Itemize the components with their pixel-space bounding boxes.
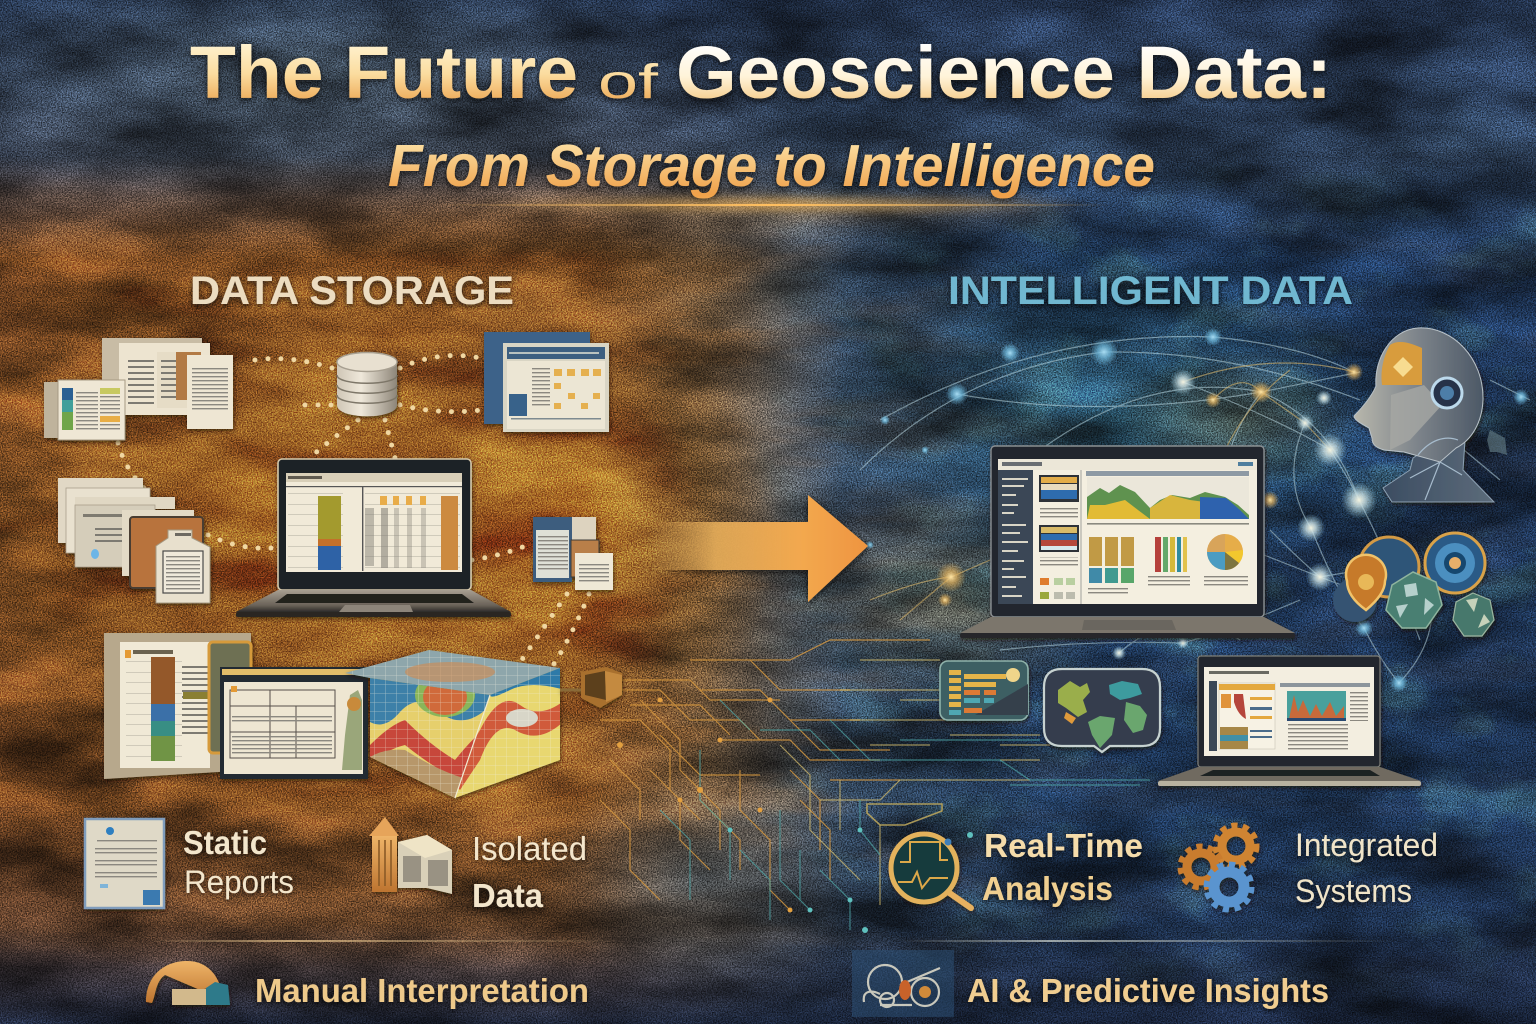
title line 1: Geoscience Data: <box>676 31 1332 114</box>
icon: magnifier real-time analysis <box>891 834 971 908</box>
feature row: storage limits <box>85 817 587 914</box>
label: real-time analysis <box>982 827 1143 907</box>
intelligent data illustration <box>940 328 1507 786</box>
icon: second laptop <box>1158 656 1421 786</box>
label: integrated systems: Systems <box>1295 873 1412 909</box>
dotted connectors <box>118 356 589 670</box>
icon: blue gear <box>1207 865 1251 909</box>
section heading: data storage: DATA STORAGE <box>190 269 514 313</box>
footer: AI and predictive insights <box>852 950 1329 1017</box>
title line 1: of <box>598 56 659 109</box>
label: integrated systems <box>1295 827 1438 909</box>
icon: stacked folders <box>58 478 210 603</box>
icon: trapezoid marker <box>867 804 942 825</box>
icon: data tile <box>940 661 1028 720</box>
footer divider left <box>150 940 620 942</box>
label: manual interpretation: Manual Interpretation <box>255 972 589 1009</box>
icon: small right doc cluster <box>533 517 613 590</box>
icon: orange gear left <box>1181 847 1221 887</box>
icon: integrated gears <box>1181 826 1256 909</box>
network arcs and nodes <box>860 328 1530 692</box>
icon: main analytics laptop <box>960 446 1295 638</box>
icon: bottom report sheets <box>104 633 368 779</box>
section heading: intelligent data: INTELLIGENT DATA <box>948 269 1353 313</box>
icon: manual interpretation <box>146 961 230 1005</box>
label: isolated data: Isolated <box>472 830 587 867</box>
icon: isolated data tower and book <box>369 817 452 894</box>
label: static reports <box>183 824 294 900</box>
title line 1 <box>190 31 1332 114</box>
circuit traces <box>600 640 1150 933</box>
title block <box>190 31 1332 209</box>
icon: top-right dashboard windows <box>484 332 609 432</box>
flow arrow <box>650 495 868 602</box>
label: isolated data: Data <box>472 877 544 914</box>
icon: geological cube <box>345 650 565 812</box>
subtitle: From Storage to Intelligence <box>388 133 1155 199</box>
icon: hexagon at far right <box>1487 430 1507 455</box>
label: real-time analysis: Real-Time <box>984 827 1143 864</box>
subtitle glow rule <box>430 200 1110 209</box>
label: static reports: Reports <box>184 864 294 900</box>
icon: orange gear upper <box>1216 826 1256 866</box>
icon: geo badge cluster <box>1333 533 1494 636</box>
icon: static report <box>85 819 164 908</box>
icon: top-left paper stack <box>44 338 233 440</box>
footer divider right <box>900 940 1400 942</box>
feature row: intelligence benefits <box>867 804 1438 909</box>
label: real-time analysis: Analysis <box>982 870 1113 907</box>
label: AI and predictive insights: AI & Predictive Insights <box>967 972 1329 1009</box>
icon: AI insights machine <box>852 950 954 1017</box>
label: isolated data <box>472 830 587 914</box>
label: static reports: Static <box>183 824 267 861</box>
data storage illustration <box>44 332 622 812</box>
title line 1: The Future <box>190 31 578 114</box>
footer: manual interpretation <box>146 961 589 1009</box>
icon: map tile with pointer <box>1044 669 1160 752</box>
icon: database cylinder <box>337 352 397 416</box>
icon: small wooden box <box>560 667 622 708</box>
icon: AI head <box>1354 328 1494 502</box>
label: integrated systems: Integrated <box>1295 827 1438 863</box>
icon: central laptop with table <box>236 459 511 617</box>
